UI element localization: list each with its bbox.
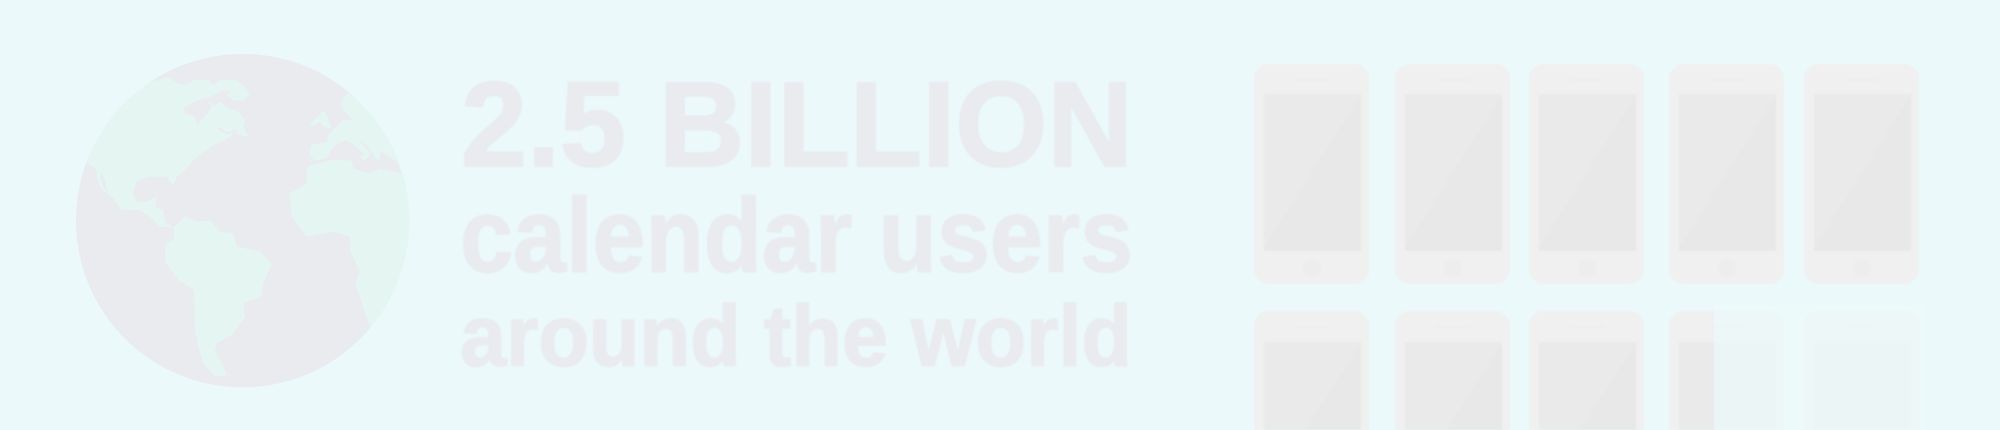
phone row 1, phone 3 bbox=[1529, 64, 1644, 284]
Africa bbox=[290, 160, 409, 326]
subheading: calendar users: calendar users bbox=[460, 178, 1133, 294]
headline: 2.5 billion: 2.5 BILLION bbox=[461, 56, 1133, 192]
Canadian coast inlet bbox=[218, 128, 237, 133]
globe land masses bbox=[87, 78, 409, 376]
subheading: around the world: around the world bbox=[460, 288, 1132, 384]
globe ocean bbox=[76, 54, 409, 387]
Gulf of California bbox=[100, 172, 108, 193]
phone row 2, phone 1 bbox=[1254, 311, 1369, 430]
phone grid bbox=[1254, 64, 1919, 430]
headline text bbox=[460, 56, 1133, 384]
fade overlay on remaining phones bbox=[1714, 305, 1926, 430]
phone row 1, phone 2 bbox=[1395, 64, 1510, 284]
North America bbox=[87, 78, 250, 227]
South America bbox=[165, 217, 272, 377]
phone row 2, phone 3 bbox=[1529, 311, 1644, 430]
phone row 1, phone 1 bbox=[1254, 64, 1369, 284]
Europe bbox=[310, 93, 402, 173]
Hudson Bay bbox=[183, 98, 212, 125]
phone row 2, phone 4 bbox=[1669, 311, 1784, 430]
icon: globe bbox=[76, 54, 409, 388]
phone row 2, phone 2 bbox=[1395, 311, 1510, 430]
phone row 1, phone 5 bbox=[1804, 64, 1919, 284]
phone row 1, phone 4 bbox=[1669, 64, 1784, 284]
phone row 2, phone 5 bbox=[1804, 311, 1919, 430]
British Isles bbox=[310, 110, 332, 128]
